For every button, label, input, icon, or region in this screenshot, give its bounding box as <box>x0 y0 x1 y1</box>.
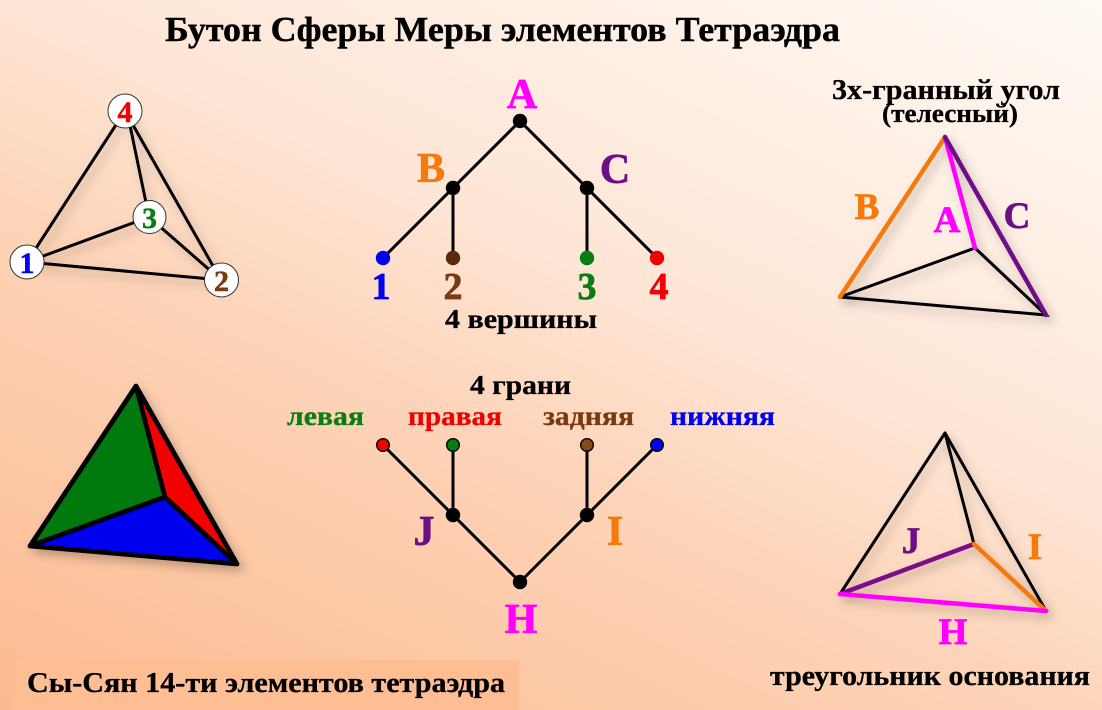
diagram: vertices tree: B <box>417 146 445 192</box>
diagram: vertices tree <box>372 72 668 308</box>
diagram: faces tree: правая <box>408 401 502 431</box>
diagram: faces tree: задняя <box>543 401 634 431</box>
diagram: vertices tree: 4 <box>650 266 668 308</box>
diagram: vertices tree: C <box>600 147 630 193</box>
caption: 4 vertices: 4 вершины <box>445 304 597 334</box>
panel: numbered tetrahedron <box>10 94 238 298</box>
diagram: vertices tree: 1 <box>372 266 390 308</box>
panel: base triangle tetrahedron: I <box>1028 527 1042 568</box>
panel: solid angle tetrahedron <box>832 75 1060 315</box>
caption: base triangle: треугольник основания <box>770 661 1090 692</box>
diagram: faces tree: нижняя <box>670 401 775 431</box>
vertex 1: 1 <box>20 247 34 280</box>
footer label <box>12 660 519 710</box>
vertex 4 <box>108 94 142 129</box>
diagram: faces tree: J <box>414 509 434 555</box>
title: Бутон Сферы Меры элементов Тетраэдра <box>165 11 840 49</box>
caption: 4 faces: 4 грани <box>470 370 571 400</box>
diagram: vertices tree: A <box>507 72 538 118</box>
diagram: faces tree: левая <box>287 401 364 431</box>
panel: coloured faces tetrahedron <box>30 386 237 564</box>
vertex 2 <box>204 263 238 298</box>
panel: base triangle tetrahedron: H <box>939 612 968 653</box>
panel: base triangle tetrahedron: J <box>902 521 920 562</box>
panel: solid angle tetrahedron: B <box>855 187 879 228</box>
diagram: faces tree: I <box>607 509 623 555</box>
panel: base triangle tetrahedron <box>840 433 1046 653</box>
panel: solid angle tetrahedron: 3х-гранный угол <box>832 75 1060 106</box>
vertex 2: 2 <box>214 265 229 298</box>
diagram: faces tree <box>287 401 775 643</box>
panel: solid angle tetrahedron: A <box>934 200 961 241</box>
vertex 4: 4 <box>118 96 132 129</box>
vertex 3 <box>133 200 166 235</box>
vertex 3: 3 <box>142 202 157 235</box>
diagram: vertices tree: 3 <box>578 266 596 308</box>
panel: solid angle tetrahedron: C <box>1004 196 1030 237</box>
footer label: Сы-Сян 14-ти элементов тетраэдра <box>27 667 506 699</box>
diagram: vertices tree: 2 <box>444 266 462 308</box>
diagram: faces tree: H <box>505 597 537 643</box>
panel: solid angle tetrahedron: (телесный) <box>882 99 1018 128</box>
vertex 1 <box>10 245 44 280</box>
